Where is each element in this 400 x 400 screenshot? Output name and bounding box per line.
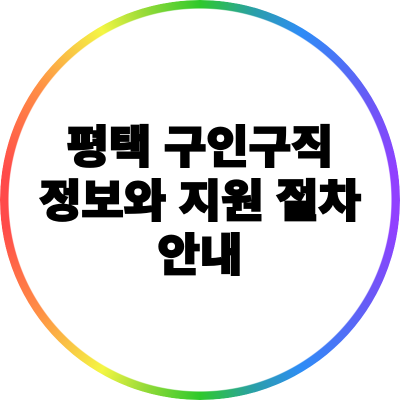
title line 3: 안내 (158, 230, 242, 280)
title line 1: 평택 구인구직 (67, 122, 333, 172)
title line 2: 정보와 지원 절차 (39, 176, 361, 226)
